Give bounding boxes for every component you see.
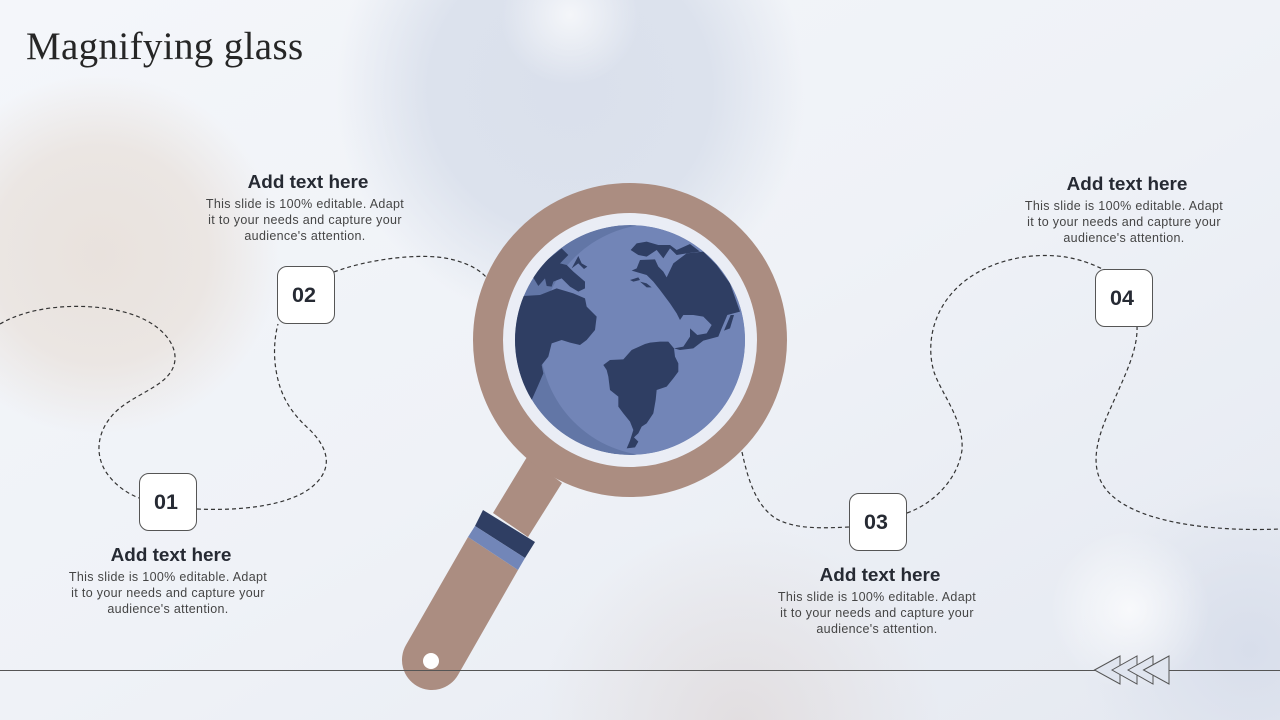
globe (515, 225, 745, 455)
text block 01: it to your needs and capture your (71, 586, 265, 600)
text block 01: Add text here (111, 545, 231, 566)
text block 04 (1025, 174, 1223, 245)
number 01: 01 (154, 490, 178, 514)
lens ring (488, 198, 772, 482)
number 03: 03 (864, 510, 888, 534)
number 04: 04 (1110, 286, 1134, 310)
number 03 (849, 493, 907, 551)
text block 01 (69, 545, 267, 616)
text block 01: This slide is 100% editable. Adapt (69, 570, 267, 584)
text block 03: it to your needs and capture your (780, 606, 974, 620)
number 02 (277, 266, 335, 324)
number 01 (139, 473, 197, 531)
text block 03: This slide is 100% editable. Adapt (778, 590, 976, 604)
text block 02: This slide is 100% editable. Adapt (206, 197, 404, 211)
text block 02: it to your needs and capture your (208, 213, 402, 227)
text block 04: This slide is 100% editable. Adapt (1025, 199, 1223, 213)
text block 03: audience's attention. (816, 622, 938, 636)
text block 03: Add text here (820, 565, 940, 586)
text block 04: Add text here (1067, 174, 1187, 195)
title: Magnifying glass (26, 24, 304, 68)
text block 02 (206, 172, 404, 243)
number 02: 02 (292, 283, 316, 307)
text block 01: audience's attention. (107, 602, 229, 616)
text block 02: audience's attention. (244, 229, 366, 243)
magnifying glass (402, 183, 787, 690)
text block 04: it to your needs and capture your (1027, 215, 1221, 229)
text block 03 (778, 565, 976, 636)
number 04 (1095, 269, 1153, 327)
handle (402, 457, 562, 690)
text block 04: audience's attention. (1063, 231, 1185, 245)
text block 02: Add text here (248, 172, 368, 193)
